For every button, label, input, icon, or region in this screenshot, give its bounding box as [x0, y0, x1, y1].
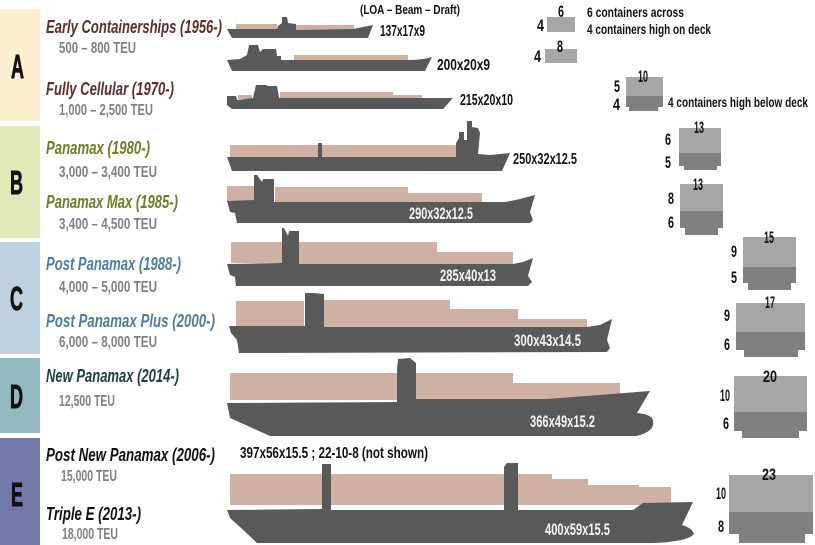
cross-section: 10 wide: [613, 67, 663, 114]
label: Triple E: 18,000 TEU: [62, 526, 118, 543]
label: Fully Cellular: Fully Cellular (1970-): [46, 79, 174, 99]
label: Fully Cellular: [46, 79, 174, 119]
label: Post Panamax Plus: 6,000 – 8,000 TEU: [59, 334, 157, 351]
cross-section: 10 wide: 5: [614, 77, 620, 96]
cross-section: 15 wide: 15: [764, 228, 774, 247]
ship: panamax max: 290x32x12.5: [409, 204, 473, 223]
cross-section: 23 wide: 10: [716, 484, 726, 503]
category band B: [0, 126, 40, 238]
cross-section: 13 wide, 8+6: 6: [668, 213, 674, 232]
label: Post Panamax: [46, 254, 181, 296]
cross-section: 15 wide: 9: [731, 242, 737, 261]
ship: new panamax: [227, 358, 653, 436]
legend text: 6 containers across: [587, 4, 684, 20]
label: New Panamax: 12,500 TEU: [59, 393, 115, 410]
label: Triple E: [46, 504, 141, 543]
label: Post Panamax: 4,000 – 5,000 TEU: [59, 279, 157, 296]
category band C: C: [10, 280, 23, 317]
label: Post Panamax Plus: Post Panamax Plus (2000-): [46, 311, 215, 331]
cross-section: 8 wide: [534, 37, 577, 66]
category band A: [0, 9, 40, 121]
label: Panamax Max: Panamax Max (1985-): [46, 192, 178, 212]
cross-section: 17 wide: 9: [724, 306, 730, 325]
category band D: [0, 358, 40, 433]
label: Early Containerships: Early Containerships (1956-): [46, 17, 222, 37]
category band C: [0, 242, 40, 354]
legend text: [587, 4, 711, 37]
cross-section: 13 wide, 6+5: [665, 118, 721, 172]
cross-section: 13 wide, 6+5: 6: [665, 130, 671, 149]
cross-section: 23 wide: 23: [762, 465, 776, 484]
cross-section: 13 wide, 8+6: 8: [668, 189, 674, 208]
ship: post panamax: 285x40x13: [440, 266, 496, 285]
label: Post New Panamax: [46, 445, 215, 485]
dimension 215x20x10: 215x20x10: [460, 92, 513, 109]
category band D: D: [10, 378, 23, 415]
ship: post panamax plus: [229, 293, 612, 353]
ship: new panamax: 366x49x15.2: [530, 412, 595, 431]
category band E: [0, 438, 40, 545]
dimensions key: (LOA – Beam – Draft): [360, 2, 460, 17]
legend: 6 across by 4 high: 6: [558, 2, 564, 21]
label: Panamax: [46, 138, 157, 181]
note: post new panamax dimensions: 397x56x15.5 ; 22-10-8 (not shown): [240, 445, 428, 462]
cross-section: 20 wide: 6: [723, 414, 729, 433]
category band B: B: [10, 164, 23, 201]
ship: fully cellular: [227, 85, 453, 109]
ship: panamax: [227, 121, 510, 171]
label: Panamax Max: [46, 192, 178, 233]
legend: 6 across by 4 high: 4: [537, 16, 544, 35]
label: New Panamax: New Panamax (2014-): [46, 366, 179, 386]
label: Early Containerships: [46, 17, 222, 57]
cross-section: 23 wide: [716, 465, 813, 543]
label: Panamax: 3,000 – 3,400 TEU: [59, 164, 157, 181]
label: Post New Panamax: 15,000 TEU: [61, 468, 117, 485]
cross-section: 17 wide: 6: [724, 335, 730, 354]
label: Triple E: Triple E (2013-): [46, 504, 141, 524]
dimension 200x20x9: 200x20x9: [437, 57, 490, 74]
label: Post New Panamax: Post New Panamax (2006-): [46, 445, 215, 465]
ship: post panamax plus: 300x43x14.5: [514, 331, 581, 350]
ship: triple E: 400x59x15.5: [545, 520, 610, 539]
ship: panamax max: [227, 175, 535, 223]
cross-section: 13 wide, 6+5: 13: [694, 118, 704, 137]
dimension 250x32x12.5: 250x32x12.5: [513, 151, 577, 168]
ship: early containership: [227, 17, 373, 38]
category band E: E: [11, 476, 23, 513]
cross-section: 20 wide: [720, 367, 807, 438]
ship: 200x20x9: [227, 45, 432, 71]
category band A: A: [11, 48, 24, 85]
cross-section: 13 wide, 8+6: 13: [693, 175, 703, 194]
cross-section: 13 wide, 8+6: [668, 175, 723, 235]
label: New Panamax: [46, 366, 179, 410]
label: Early Containerships: 500 – 800 TEU: [59, 40, 136, 57]
cross-section: 20 wide: 10: [720, 386, 730, 405]
cross-section: 15 wide: [731, 228, 796, 290]
cross-section: 17 wide: 17: [765, 293, 775, 312]
label: Post Panamax: Post Panamax (1988-): [46, 254, 181, 274]
label: Post Panamax Plus: [46, 311, 215, 351]
dimension 137x17x9: 137x17x9: [380, 23, 425, 40]
label: Panamax Max: 3,400 – 4,500 TEU: [59, 216, 157, 233]
cross-section: 20 wide: 20: [763, 367, 777, 386]
cross-section: 13 wide, 6+5: 5: [665, 153, 671, 172]
label: Panamax: Panamax (1980-): [46, 138, 150, 158]
ship: post panamax: [227, 228, 533, 286]
legend text: 4 containers high on deck: [587, 21, 711, 37]
cross-section: 17 wide: [724, 293, 805, 357]
cross-section: 10 wide: 4: [613, 95, 620, 114]
cross-section: 15 wide: 5: [731, 268, 737, 287]
label: Fully Cellular: 1,000 – 2,500 TEU: [59, 102, 153, 119]
cross-section: 23 wide: 8: [718, 517, 724, 536]
cross-section: 10 wide: 10: [638, 67, 648, 86]
ship: triple E: [227, 463, 694, 543]
cross-section: 8 wide: 4: [534, 47, 541, 66]
cross-section: 8 wide: 8: [557, 37, 563, 56]
legend: 6 across by 4 high: [537, 2, 575, 35]
